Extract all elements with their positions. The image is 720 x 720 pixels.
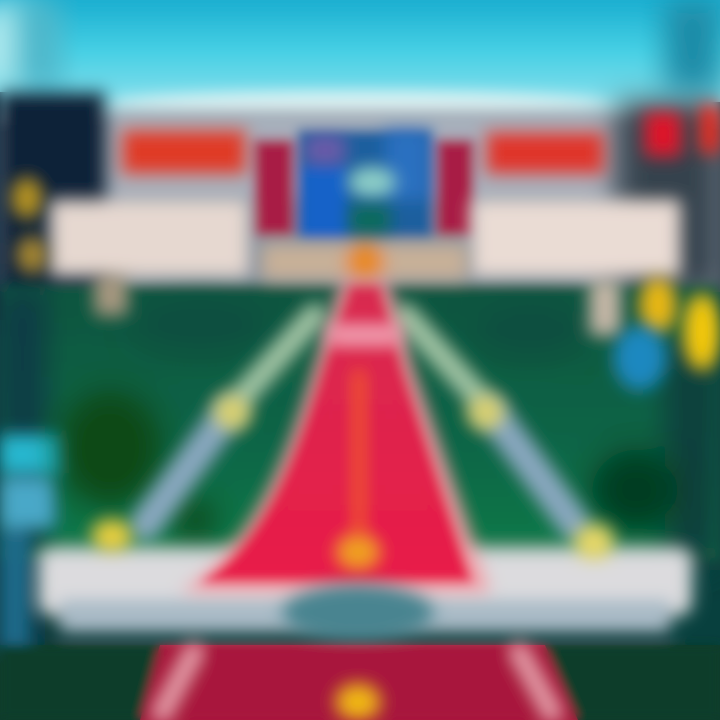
bottom ground	[0, 645, 720, 720]
walkway lights	[214, 394, 504, 430]
building base	[0, 114, 720, 292]
center screen	[298, 130, 432, 238]
yellow lights	[12, 178, 720, 370]
left cyan sign	[0, 435, 65, 650]
right white building	[472, 200, 680, 276]
center grey platform	[282, 584, 434, 640]
white plaza band	[38, 520, 692, 632]
center steps	[262, 242, 467, 282]
left dark tower	[0, 92, 105, 320]
red banners	[122, 105, 720, 174]
lawn	[0, 285, 720, 570]
sky	[0, 0, 720, 125]
crimson pillars	[255, 140, 473, 235]
blue blob	[614, 326, 666, 390]
columns near building	[95, 275, 620, 335]
left white building	[50, 200, 248, 276]
right dark tower	[618, 102, 720, 292]
red carpet	[180, 280, 490, 592]
dark trees	[58, 390, 682, 544]
diagonal walkways	[145, 315, 575, 525]
